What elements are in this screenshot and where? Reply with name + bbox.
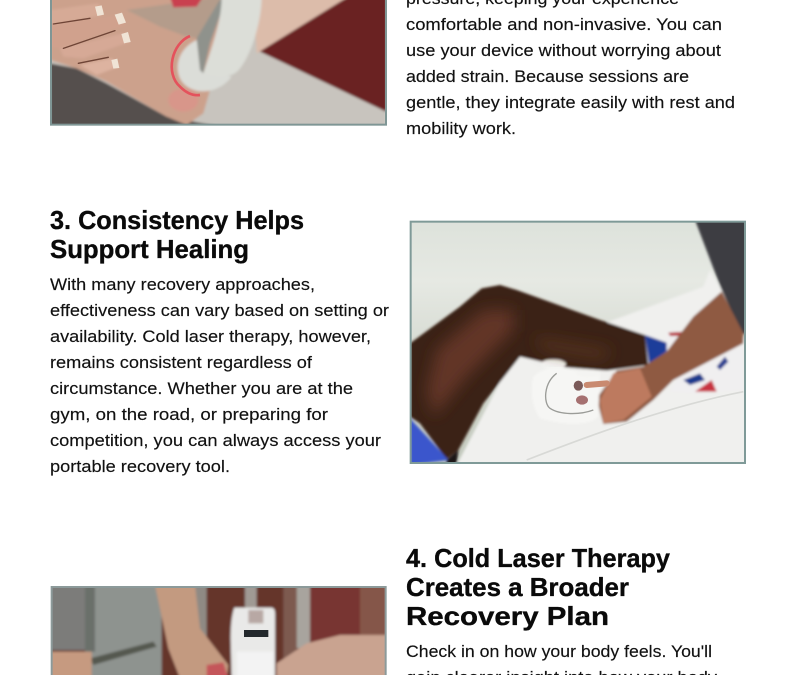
text block: section 2 body continued: added strain. Because sessions are: [406, 67, 689, 86]
text block: section 3 body: With many recovery approaches,: [50, 275, 315, 294]
text block: section 2 body continued: gentle, they integrate easily with rest and: [406, 93, 735, 112]
text block: section 2 body continued: [406, 0, 735, 138]
photo: handheld laser device: [50, 585, 387, 675]
heading: section 3: 3. Consistency Helps: [50, 205, 304, 235]
text block: section 3 body: competition, you can always access your: [50, 431, 381, 450]
heading: section 4: Recovery Plan: [406, 601, 609, 631]
text block: section 3 body: remains consistent regardless of: [50, 353, 312, 372]
text block: section 3 body: circumstance. Whether you are at the: [50, 379, 353, 398]
text block: section 2 body continued: mobility work.: [406, 119, 516, 138]
heading: section 4: [406, 543, 671, 631]
heading: section 3: [50, 205, 304, 264]
text block: section 4 body: Check in on how your body feels. You'll: [406, 642, 712, 661]
text block: section 3 body: gym, on the road, or preparing for: [50, 405, 328, 424]
photo: knee treatment on white table: [410, 220, 747, 465]
text block: section 4 body: [406, 642, 718, 675]
text block: section 3 body: [50, 275, 389, 476]
text block: section 2 body continued: use your device without worrying about: [406, 41, 721, 60]
heading: section 4: 4. Cold Laser Therapy: [406, 543, 671, 573]
heading: section 3: Support Healing: [50, 234, 249, 264]
photo: laser device on heel: [50, 0, 387, 127]
heading: section 4: Creates a Broader: [406, 572, 629, 602]
text block: section 3 body: effectiveness can vary based on setting or: [50, 301, 389, 320]
text block: section 3 body: availability. Cold laser therapy, however,: [50, 327, 371, 346]
text block: section 2 body continued: comfortable and non-invasive. You can: [406, 15, 722, 34]
text block: section 3 body: portable recovery tool.: [50, 457, 230, 476]
